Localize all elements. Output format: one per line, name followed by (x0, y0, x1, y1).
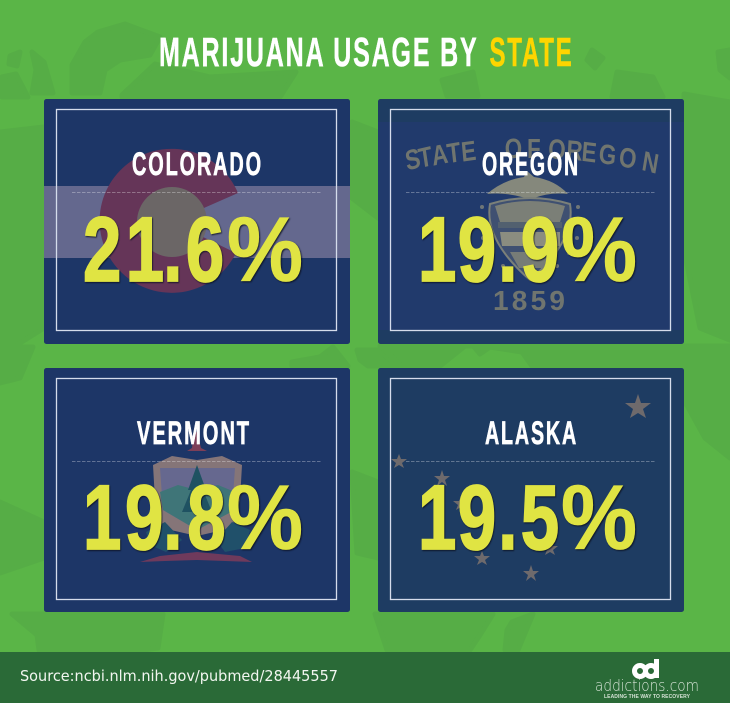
percentage: Colorado (83, 198, 303, 301)
percentage: Oregon: 19.9 (418, 198, 559, 301)
panel: Colorado (44, 99, 350, 344)
state name: Oregon: OREGON (482, 146, 580, 182)
percentage: Colorado: % (227, 199, 303, 301)
footer bar (0, 652, 730, 703)
percentage: Alaska (418, 466, 637, 569)
panel: Alaska (378, 368, 684, 612)
source citation: Source:ncbi.nlm.nih.gov/pubmed/28445557 (20, 667, 338, 685)
title: STATE (490, 29, 574, 75)
percentage: Alaska: 19.5 (418, 466, 559, 569)
Oregon flag lettering: STATE OF OREGON (403, 133, 661, 180)
percentage: Vermont: 19.8 (83, 466, 226, 569)
state name: Alaska: ALASKA (485, 415, 578, 451)
logo: addictions.com (595, 659, 699, 700)
title: MARIJUANA USAGE BY (159, 29, 478, 75)
Alaska flag stars (391, 394, 651, 581)
panel: Oregon (378, 99, 684, 344)
Vermont flag coat of arms (140, 432, 252, 562)
icon: logo mark (634, 659, 656, 678)
percentage: Vermont (83, 466, 303, 569)
state name: Vermont: VERMONT (137, 415, 251, 451)
percentage: Oregon (418, 198, 637, 301)
Oregon flag lettering: 1859 (493, 285, 565, 316)
state name: Colorado: COLORADO (132, 146, 263, 182)
percentage: Vermont: % (227, 467, 303, 569)
Oregon flag seal (478, 171, 582, 280)
Colorado flag band (44, 186, 350, 258)
percentage: Colorado: 21.6 (83, 198, 224, 301)
Oregon flag lettering (403, 133, 661, 316)
logo: addictions.com: LEADING THE WAY TO RECOVERY (604, 694, 691, 700)
percentage: Alaska: % (561, 467, 637, 569)
Colorado flag emblem (100, 149, 238, 293)
percentage: Oregon: % (561, 199, 637, 301)
logo: addictions.com: addictions.com (595, 676, 699, 695)
panel: Vermont (44, 368, 350, 612)
